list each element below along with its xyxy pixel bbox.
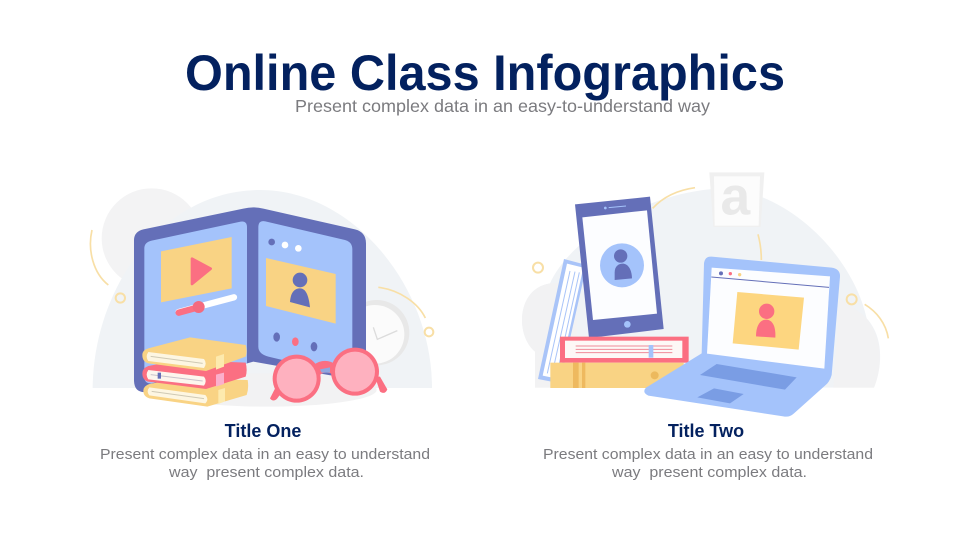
text block: title one description xyxy=(100,446,430,481)
laptop xyxy=(644,257,840,417)
tablet body xyxy=(134,207,366,392)
profile panel xyxy=(266,258,336,324)
person icon xyxy=(756,304,775,338)
play icon xyxy=(192,259,211,284)
video panel xyxy=(733,292,804,350)
decorative arcs and rings xyxy=(533,188,888,338)
letter card: a xyxy=(720,167,750,226)
slider xyxy=(179,297,234,312)
background blobs xyxy=(93,188,432,407)
stacked books xyxy=(142,337,248,407)
keyboard xyxy=(700,364,797,390)
text block: title one description: Present complex data in an easy to understand xyxy=(100,446,430,463)
trackpad xyxy=(697,388,744,403)
screen xyxy=(707,268,830,369)
letter card xyxy=(709,167,764,227)
glasses xyxy=(270,348,387,403)
title: Online Class Infographics xyxy=(185,45,785,101)
text block: title two description xyxy=(543,446,873,481)
books under phone xyxy=(550,337,689,388)
video panel xyxy=(161,237,232,302)
avatar xyxy=(600,243,644,287)
illustration: phone, books and laptop xyxy=(522,167,888,417)
clock xyxy=(344,300,409,365)
left screen xyxy=(144,222,247,383)
middle book xyxy=(142,360,247,389)
background blobs xyxy=(522,188,880,388)
heading: title one: Title One xyxy=(225,421,301,441)
person icon xyxy=(290,273,310,307)
heading: title two: Title Two xyxy=(668,421,744,441)
text block: title one description: way present complex data. xyxy=(168,464,364,481)
top book xyxy=(142,337,247,371)
notebook behind phone xyxy=(538,259,587,383)
text block: title two description: Present complex data in an easy to understand xyxy=(543,446,873,463)
illustration: tablet, books and glasses xyxy=(90,188,433,407)
bottom book xyxy=(143,378,248,407)
decorative arcs and rings xyxy=(90,230,433,336)
subtitle: Present complex data in an easy-to-understand way xyxy=(295,96,710,116)
phone xyxy=(575,197,664,338)
right screen xyxy=(258,221,352,377)
text block: title two description: way present complex data. xyxy=(611,464,807,481)
